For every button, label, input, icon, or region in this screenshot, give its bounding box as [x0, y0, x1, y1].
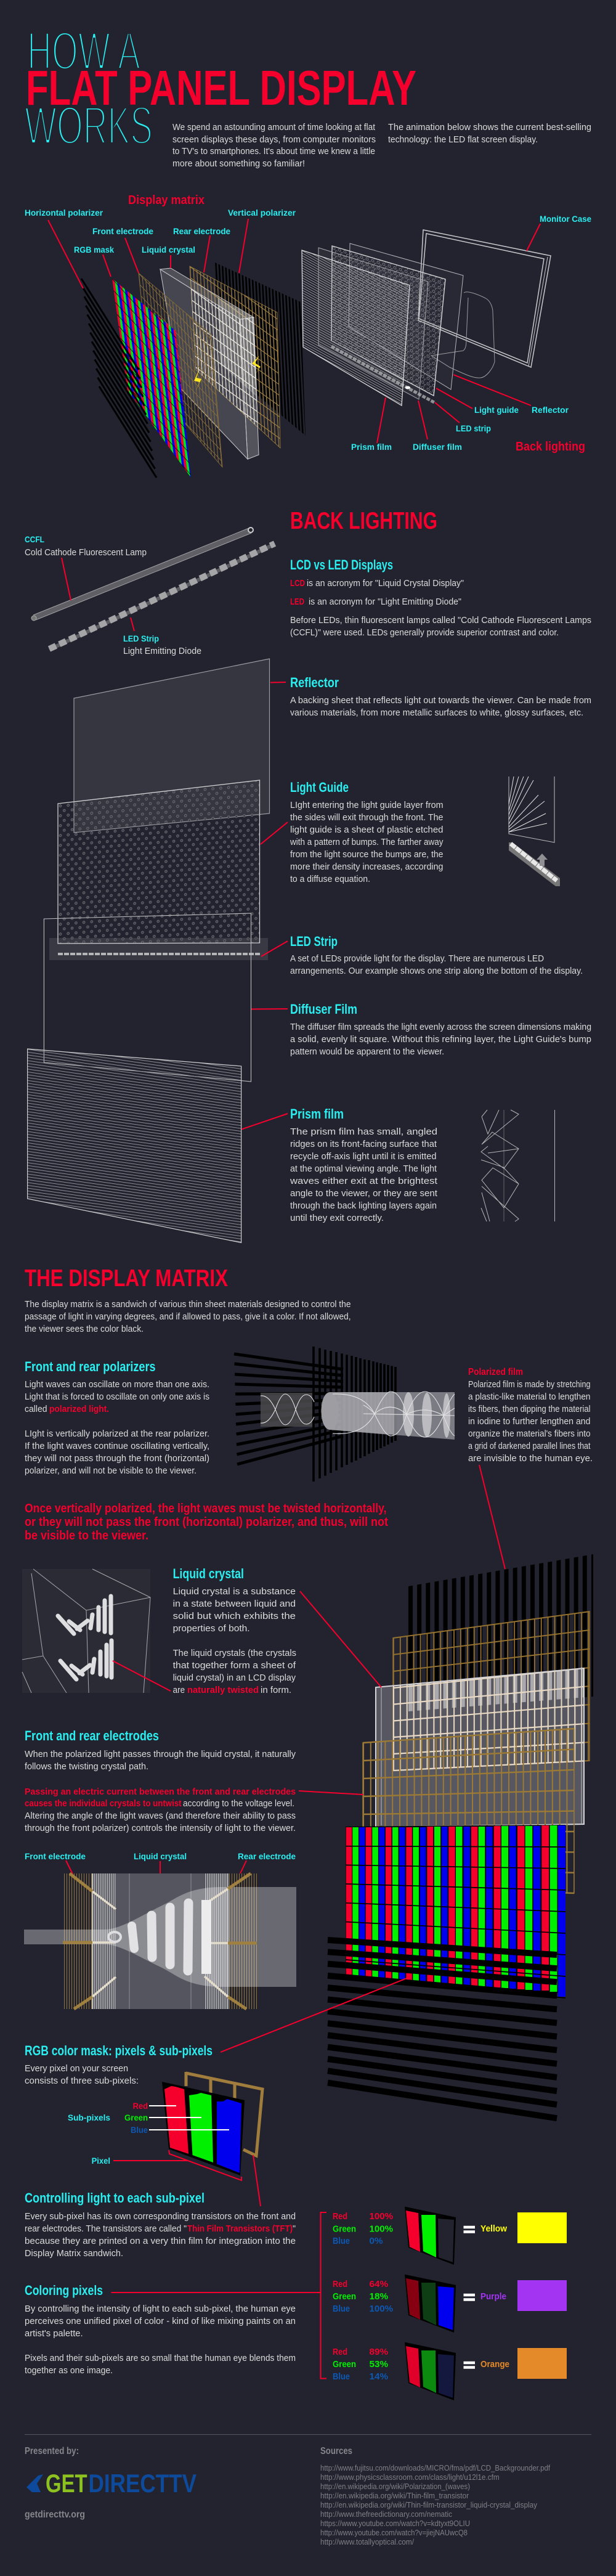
color bracket [111, 2212, 326, 2379]
horizontal polarizer bars [234, 1354, 343, 1464]
color example: purple [333, 2275, 567, 2333]
text: LED strip: A set of LEDs provide light for the display. There are numerous LED [290, 953, 544, 964]
text: electrodes: Altering the angle of the light waves (and therefore their ability to pass [25, 1811, 296, 1821]
text: electrodes: Passing an electric current between the front and rear electrodes [25, 1787, 296, 1797]
diffuser film [318, 248, 428, 399]
color example: yellow: 100% [370, 2211, 393, 2222]
labels: CCFL [25, 534, 44, 544]
LCD vs LED text: LCD [290, 578, 305, 589]
prism illustration [481, 1110, 554, 1221]
LCD vs LED text: is an acronym for "Liquid Crystal Display" [307, 578, 464, 589]
color example: orange: 89% [370, 2347, 388, 2357]
back lighting callout lines [241, 682, 288, 1130]
polarized light illustration [234, 1347, 455, 1482]
text: prism film: at the optimal viewing angle. The light [290, 1164, 437, 1174]
text: polarized film: Polarized film is made by stretching [468, 1379, 590, 1390]
text: electrodes: follows the twisting crystal path. [25, 1761, 148, 1772]
text: prism film: ridges on its front-facing surface that [290, 1139, 437, 1149]
sources: http://www.thefreedictionary.com/nematic [320, 2509, 452, 2519]
crystals bottom stack [60, 1641, 111, 1679]
RGB mask [112, 279, 191, 478]
display matrix intro: The display matrix is a sandwich of various thin sheet materials designed to control the [25, 1299, 351, 1310]
LCD vs LED text [290, 557, 591, 638]
hero labels: Light guide [474, 405, 519, 415]
labels: Sub-pixels [68, 2113, 110, 2122]
LED strip [49, 544, 275, 650]
text: controlling light: rear electrodes. The transistors are called " [25, 2223, 187, 2234]
color example: purple: 64% [370, 2279, 388, 2289]
text: liquid crystal: Liquid crystal [173, 1566, 244, 1581]
light guide sheet [58, 780, 260, 944]
exploded back lighting sheets [28, 659, 269, 1242]
labels: Blue [131, 2125, 148, 2135]
text: liquid crystal: naturally twisted [187, 1685, 259, 1695]
callout lines [62, 558, 134, 631]
text: prism film: Prism film [290, 1106, 344, 1122]
CCFL tube [31, 528, 253, 621]
text: prism film: recycle off-axis light until it is emitted [290, 1151, 436, 1162]
text: RGB mask: consists of three sub-pixels: [25, 2076, 139, 2086]
text: polarizers: Light waves can oscillate on more than one axis. [25, 1379, 209, 1390]
color example: orange: 53% [370, 2359, 388, 2370]
sources: http://www.totallyoptical.com/ [320, 2537, 414, 2546]
LCD vs LED text: LCD vs LED Displays [290, 557, 393, 573]
text: polarized film: a grid of darkened parallel lines that [468, 1441, 591, 1451]
sources [320, 2446, 550, 2546]
prism film [302, 250, 410, 406]
sources: http://www.youtube.com/watch?v=jiejNAUwcQ8 [320, 2528, 468, 2537]
hero labels: Display matrix [128, 194, 205, 207]
red statement: be visible to the viewer. [25, 1529, 148, 1543]
text: reflector: Reflector [290, 675, 339, 690]
labels [68, 2101, 148, 2166]
electrode labels: Liquid crystal [134, 1851, 187, 1861]
reflector sheet [74, 659, 270, 833]
front electrode [139, 273, 222, 467]
text: electrodes: causes the individual crystals to untwist [25, 1798, 182, 1809]
pixel diagram [68, 2072, 262, 2206]
electrode spikes [63, 1873, 257, 2009]
labels [25, 534, 201, 656]
text: polarized film: organize the material's fibers into [468, 1429, 590, 1439]
presented by: Presented by: [25, 2446, 79, 2456]
front electrode [363, 1729, 574, 1893]
intro text: screen displays these days, from computer monitors [172, 134, 376, 145]
text: polarizers: LIght is vertically polarized at the rear polarizer. [25, 1429, 209, 1439]
intro text [172, 122, 591, 169]
text: liquid crystal: in a state between liquid and [173, 1599, 296, 1609]
text: prism film: until they exit correctly. [290, 1213, 384, 1223]
horizontal polarizer [81, 279, 156, 478]
text: controlling light [25, 2190, 296, 2259]
heading: back lighting: BACK LIGHTING [290, 508, 437, 534]
text: controlling light: Every sub-pixel has its own corresponding transistors on the front and [25, 2211, 296, 2222]
text: RGB mask [25, 2043, 213, 2086]
text: electrodes: Front and rear electrodes [25, 1728, 159, 1743]
text: controlling light: " [293, 2223, 296, 2234]
text: light guide: from the light source the bumps are, the [290, 849, 444, 860]
display matrix intro: the viewer sees the color black. [25, 1324, 144, 1334]
LED bar and arrow [509, 842, 560, 886]
hero labels: Front electrode [92, 226, 153, 236]
text: reflector: A backing sheet that reflects light out towards the viewer. Can be made from [290, 695, 591, 706]
text: coloring pixels [25, 2283, 296, 2376]
blue sub-pixel [217, 2099, 241, 2173]
text: liquid crystal: liquid crystal) in an LCD display [173, 1673, 296, 1683]
title: HOW A [27, 21, 140, 81]
pixel bracket and callouts [113, 2150, 261, 2206]
CCFL and LED strip illustration [25, 528, 275, 656]
exploded diagram: display matrix layers [81, 263, 306, 478]
color example: purple: Blue [333, 2304, 350, 2314]
text: coloring pixels: together as one image. [25, 2365, 113, 2376]
exploded diagram: back lighting layers [302, 230, 551, 406]
rear electrode [393, 1612, 590, 1771]
logo [26, 2469, 197, 2498]
labels: Cold Cathode Fluorescent Lamp [25, 547, 147, 558]
text: polarizers: polarized light. [49, 1404, 109, 1414]
text: prism film: through the back lighting layers again [290, 1200, 437, 1211]
vertical polarizer bars [314, 1347, 395, 1482]
electrode labels [25, 1851, 296, 1861]
LED strip [331, 346, 434, 402]
text: liquid crystal [173, 1566, 296, 1695]
reflector [349, 243, 463, 389]
vertical polarizer [408, 1554, 593, 1711]
text: diffuser film [290, 1001, 591, 1057]
text: polarizers: called [25, 1404, 47, 1414]
text: diffuser film: a solid, evenly lit square. Without this refining layer, the Light Guide's bump [290, 1034, 591, 1045]
hero labels [25, 194, 591, 454]
icon: lightning bolts [194, 356, 261, 392]
rear electrode [190, 266, 280, 448]
labels: Red [133, 2101, 148, 2111]
text: electrodes: according to the voltage level. [183, 1798, 294, 1809]
text: polarized film: in iodine to further lengthen and [468, 1416, 590, 1427]
electrode labels: Front electrode [25, 1851, 86, 1861]
sources: Sources [320, 2446, 352, 2456]
intro text: The animation below shows the current best-selling [388, 122, 591, 132]
RGB mask [346, 1825, 565, 1998]
color example: yellow: 100% [370, 2223, 393, 2235]
labels: Pixel [92, 2156, 110, 2166]
liquid crystal [159, 267, 259, 460]
text: liquid crystal: that together form a sheet of [173, 1660, 296, 1671]
text: light guide: Light Guide [290, 780, 349, 795]
labels: Green [124, 2113, 148, 2122]
text: coloring pixels: By controlling the intensity of light to each sub-pixel, the human eye [25, 2304, 296, 2314]
sub-pixel pointers [149, 2106, 229, 2130]
intro text: We spend an astounding amount of time looking at flat [172, 122, 376, 132]
big display matrix stack [328, 1554, 593, 2118]
text: polarizers: Light that is forced to oscillate on only one axis is [25, 1392, 209, 1402]
color example: purple: Purple [480, 2291, 506, 2302]
LED strip bar [58, 953, 261, 955]
text: electrodes [25, 1728, 296, 1833]
electrode callouts [66, 1861, 246, 1874]
text: coloring pixels: perceives one unified pixel of color - kind of like mixing paints on an [25, 2316, 296, 2326]
crystals top stack [58, 1596, 111, 1634]
color example: purple: 18% [370, 2291, 388, 2302]
text: RGB mask: RGB color mask: pixels & sub-pixels [25, 2043, 213, 2058]
text: polarizers [25, 1359, 209, 1476]
LCD vs LED text: (CCFL)" were used. LEDs generally provide superior contrast and color. [290, 627, 559, 638]
green sub-pixel [189, 2093, 213, 2162]
text: diffuser film: The diffuser film spreads the light evenly across the screen dimensions making [290, 1022, 591, 1032]
text: coloring pixels: Coloring pixels [25, 2283, 103, 2298]
red sub-pixel [164, 2086, 188, 2154]
text: liquid crystal: solid but which exhibits the [173, 1611, 296, 1621]
labels: LED Strip [123, 634, 159, 643]
LCD vs LED text: Before LEDs, thin fluorescent lamps called "Cold Cathode Fluorescent Lamps [290, 615, 591, 626]
hero labels: Monitor Case [540, 214, 591, 224]
hero labels: Rear electrode [173, 226, 230, 236]
text: light guide [290, 780, 444, 884]
text: prism film [290, 1106, 438, 1223]
color example: yellow [333, 2207, 567, 2265]
text: light guide: light guide is a sheet of plastic etched [290, 825, 444, 835]
light beam [24, 1887, 296, 1987]
prism sheet [28, 1049, 241, 1242]
text: reflector: various materials, from more metallic surfaces to white, glossy surfaces, etc. [290, 707, 583, 718]
title [25, 21, 416, 155]
text: light guide: with a pattern of bumps. The farther away [290, 837, 444, 847]
text: coloring pixels: artist's palette. [25, 2328, 83, 2339]
text: polarized film: its fibers, then dipping the material [468, 1404, 590, 1414]
text: polarized film: are invisible to the human eye. [468, 1453, 593, 1464]
light guide [331, 246, 445, 396]
text: electrodes: through the front polarizer) controls the intensity of light to the viewer. [25, 1823, 296, 1833]
display matrix intro [25, 1299, 351, 1334]
monitor case [418, 230, 551, 378]
text: prism film: waves either exit at the brightest [290, 1176, 438, 1186]
electrode diagram [24, 1873, 296, 2009]
hero labels: Prism film [351, 442, 392, 452]
liquid crystal illustration [22, 1569, 150, 1693]
text: liquid crystal: in form. [261, 1685, 291, 1695]
hero labels: Liquid crystal [142, 245, 195, 255]
color example: yellow: Blue [333, 2236, 350, 2246]
color example: yellow: Yellow [480, 2223, 507, 2234]
text: liquid crystal: are [173, 1685, 185, 1695]
text: diffuser film: pattern would be apparent to the viewer. [290, 1046, 444, 1057]
color example: orange [333, 2342, 567, 2400]
vertical polarizer [215, 263, 306, 436]
LCD vs LED text: LED [290, 597, 304, 607]
red statement: Once vertically polarized, the light waves must be twisted horizontally, [25, 1502, 387, 1515]
text: controlling light: Thin Film Transistors (TFT) [187, 2223, 293, 2234]
title: WORKS [25, 96, 153, 155]
sources: https://www.youtube.com/watch?v=kdtyxt9OLIU [320, 2519, 470, 2528]
text: polarized film: a plastic-like material to lengthen [468, 1392, 590, 1402]
presented by: getdirecttv.org [25, 2509, 85, 2520]
hero callout lines [48, 219, 540, 443]
sources: http://www.fujitsu.com/downloads/MICRO/fma/pdf/LCD_Backgrounder.pdf [320, 2463, 550, 2472]
text: prism film: The prism film has small, angled [290, 1127, 437, 1137]
LCD vs LED text: is an acronym for "Light Emitting Diode" [309, 597, 461, 607]
hero labels: Back lighting [516, 440, 585, 454]
LED glow [49, 938, 268, 960]
hero labels: Vertical polarizer [228, 208, 296, 218]
presented by [25, 2446, 197, 2520]
sources: http://en.wikipedia.org/wiki/Thin-film-transistor_liquid-crystal_display [320, 2500, 537, 2509]
panels [63, 1873, 257, 2009]
text: light guide: to a diffuse equation. [290, 874, 370, 884]
text: controlling light: Display Matrix sandwich. [25, 2248, 123, 2259]
light guide illustration [509, 776, 560, 886]
light rays box [509, 776, 554, 842]
text: RGB mask: Every pixel on your screen [25, 2063, 128, 2074]
text: liquid crystal: The liquid crystals (the crystals [173, 1648, 296, 1658]
color example: orange: 14% [370, 2371, 388, 2382]
gold electrode frame [186, 2072, 262, 2156]
logo: DIRECTTV [89, 2469, 197, 2498]
color example: purple: Green [333, 2291, 356, 2302]
text: electrodes: When the polarized light passes through the liquid crystal, it naturally [25, 1749, 296, 1759]
display matrix intro: passage of light in varying degrees, and if allowed to pass, give it a color. If not allowed, [25, 1311, 351, 1322]
text: light guide: LIght entering the light guide layer from [290, 800, 444, 810]
text: coloring pixels: Pixels and their sub-pixels are so small that the human eye blends them [25, 2353, 296, 2363]
text: polarizers: they will not pass through the front (horizontal) [25, 1453, 209, 1464]
text: polarizers: Front and rear polarizers [25, 1359, 155, 1374]
color example: purple: Red [333, 2279, 347, 2289]
crystals [108, 1900, 211, 1974]
sources: http://en.wikipedia.org/wiki/Thin-film_transistor [320, 2491, 469, 2500]
text: LED strip: LED Strip [290, 934, 338, 949]
color example: yellow: Green [333, 2223, 356, 2235]
hero labels: Reflector [532, 405, 569, 415]
hero labels: LED strip [456, 423, 491, 433]
title: FLAT PANEL DISPLAY [26, 60, 416, 115]
color example: orange: Green [333, 2359, 356, 2370]
text: polarizers: If the light waves continue oscillating vertically, [25, 1441, 209, 1451]
text: liquid crystal: Liquid crystal is a substance [173, 1586, 296, 1597]
matrix callout lines [113, 1465, 505, 2052]
text: LED strip [290, 934, 583, 976]
text: polarized film [468, 1367, 593, 1464]
black pixel [162, 2082, 245, 2175]
text: LED strip: arrangements. Our example shows one strip along the bottom of the display. [290, 966, 583, 976]
labels: Light Emitting Diode [123, 646, 201, 656]
color example: yellow: 0% [370, 2236, 383, 2246]
red statement: or they will not pass the front (horizontal) polarizer, and thus, will not [25, 1515, 388, 1529]
liquid crystal sheet [375, 1667, 585, 1827]
electrode labels: Rear electrode [238, 1851, 296, 1861]
intro text: to TV's to smartphones. It's about time we knew a little [172, 146, 375, 157]
color example: orange: Blue [333, 2371, 350, 2382]
logo: GET [46, 2469, 87, 2498]
diffuser sheet [44, 913, 251, 1082]
hero labels: RGB mask [74, 245, 114, 255]
hero labels: Diffuser film [413, 442, 462, 452]
sources: http://en.wikipedia.org/wiki/Polarization_(waves) [320, 2482, 470, 2491]
heading: the display matrix: THE DISPLAY MATRIX [25, 1265, 228, 1292]
text: polarized film: Polarized film [468, 1367, 523, 1377]
color example: purple: 100% [370, 2304, 393, 2314]
text: reflector [290, 675, 591, 718]
color example: orange: Orange [480, 2359, 509, 2370]
text: light guide: more their density increases, according [290, 862, 444, 872]
intro text: technology: the LED flat screen display. [388, 134, 538, 145]
text: controlling light: because they are printed on a very thin film for integration into the [25, 2236, 296, 2246]
color example: yellow: Red [333, 2211, 347, 2222]
waves [261, 1392, 455, 1437]
horizontal polarizer [328, 1940, 557, 2118]
text: diffuser film: Diffuser Film [290, 1001, 357, 1017]
text: polarizers: polarizer, and will not be visible to the viewer. [25, 1465, 197, 1476]
color example: orange: Red [333, 2347, 347, 2357]
text: light guide: the sides will exit through the front. The [290, 812, 444, 823]
sources: http://www.physicsclassroom.com/class/light/u12l1e.cfm [320, 2472, 500, 2482]
text: liquid crystal: properties of both. [173, 1623, 250, 1634]
light tube [261, 1392, 455, 1440]
text: prism film: angle to the viewer, or they are sent [290, 1188, 438, 1199]
hero labels: Horizontal polarizer [25, 208, 103, 218]
text: controlling light: Controlling light to each sub-pixel [25, 2190, 205, 2206]
red statement [25, 1502, 388, 1543]
intro text: more about something so familiar! [172, 158, 305, 169]
